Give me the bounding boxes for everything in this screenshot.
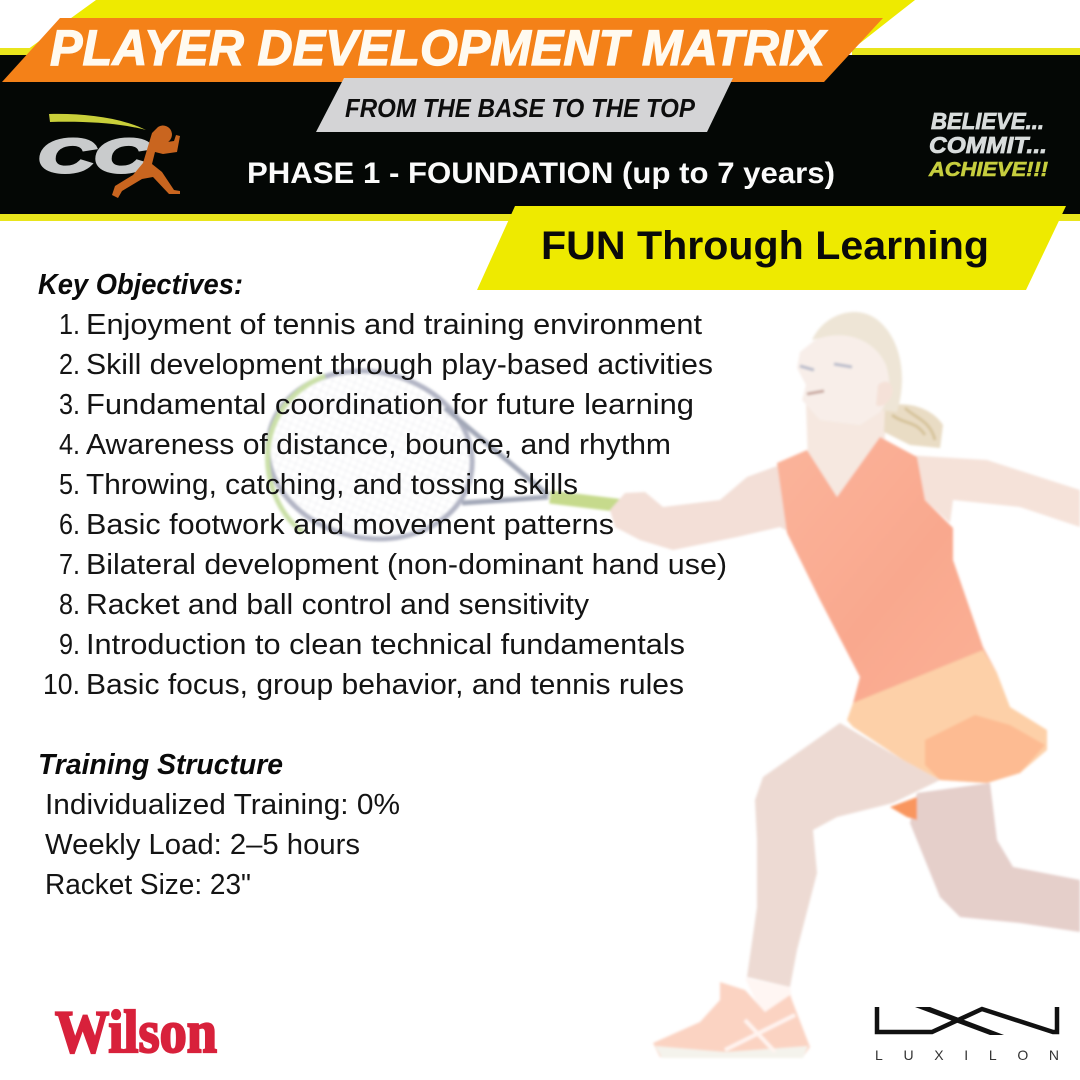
header banner [0, 0, 1080, 221]
L and N strokes [877, 1007, 1057, 1032]
throat [445, 408, 548, 503]
grip [550, 497, 632, 507]
sock [745, 978, 795, 1015]
objective 2: Skill development through play-based activities [86, 349, 713, 381]
dress top [777, 437, 997, 703]
frame [252, 352, 488, 558]
LXN mark [877, 1007, 1057, 1035]
weekly load: Weekly Load: 2–5 hours [45, 829, 360, 861]
subtitle: FROM THE BASE TO THE TOP [345, 93, 696, 123]
phase heading: PHASE 1 - FOUNDATION (up to 7 years) [247, 157, 835, 190]
objective 7: 7. [59, 549, 80, 581]
achieve: ACHIEVE!!! [928, 159, 1048, 181]
training structure heading: Training Structure [38, 749, 283, 781]
objective 2: 2. [59, 349, 80, 381]
neck and chest [806, 395, 885, 498]
yellow lower strip [0, 214, 1080, 221]
objective 9: Introduction to clean technical fundamentals [86, 629, 685, 661]
head [797, 312, 902, 425]
bun curls [892, 408, 935, 440]
objective 4: 4. [59, 429, 80, 461]
shoe [653, 982, 810, 1057]
tagline ribbon [477, 206, 1066, 290]
X diagonal [915, 1007, 1004, 1035]
green frame accent [268, 376, 325, 532]
mouth [807, 391, 824, 394]
back arm [905, 455, 1080, 527]
objective 8: Racket and ball control and sensitivity [86, 589, 590, 621]
tagline: FUN Through Learning [541, 224, 989, 268]
yellow ribbon [477, 206, 1066, 290]
logo letters: CC [38, 129, 152, 182]
shoe sole [655, 1046, 808, 1058]
face [797, 335, 889, 425]
shorts [890, 797, 917, 820]
objective 1: 1. [59, 309, 80, 341]
slogan [928, 108, 1048, 181]
objective 5: Throwing, catching, and tossing skills [86, 469, 578, 501]
logo: CCI [38, 114, 180, 198]
yellow top banner [20, 0, 915, 55]
bun mass [884, 404, 943, 448]
objective 6: 6. [59, 509, 80, 541]
objective 9: 9. [59, 629, 80, 661]
skirt shadow [925, 715, 1045, 783]
eyes [800, 364, 852, 370]
skirt [847, 650, 1047, 783]
front arm and hand [610, 463, 795, 550]
wordmark: LUXILON [875, 1047, 1059, 1063]
shoe stripes [725, 1015, 795, 1052]
bun [884, 404, 943, 448]
logo: Wilson: Wilson [55, 999, 217, 1065]
strings [256, 356, 484, 554]
objective 1: Enjoyment of tennis and training environment [86, 309, 702, 341]
swoosh [49, 114, 146, 130]
training structure [38, 749, 400, 901]
key objectives heading: Key Objectives: [38, 269, 243, 301]
objective 10: Basic focus, group behavior, and tennis rules [86, 669, 684, 701]
front leg [747, 723, 940, 987]
objective 4: Awareness of distance, bounce, and rhythm [86, 429, 671, 461]
hair [812, 312, 902, 412]
back leg [910, 783, 1080, 932]
objective 10: 10. [43, 669, 80, 701]
logo: Luxilon [875, 1007, 1059, 1063]
believe: BELIEVE... [931, 108, 1044, 134]
objective 3: 3. [59, 389, 80, 421]
objective 7: Bilateral development (non-dominant hand use) [86, 549, 727, 581]
key objectives [38, 269, 727, 701]
orange title ribbon [2, 18, 883, 82]
grey subtitle ribbon [316, 78, 733, 132]
title: PLAYER DEVELOPMENT MATRIX [50, 20, 828, 76]
black band [0, 55, 1080, 214]
yellow top strips [0, 48, 1080, 56]
individualized training: Individualized Training: 0% [45, 789, 400, 821]
ear [876, 382, 893, 406]
commit: COMMIT... [929, 132, 1047, 158]
objective 8: 8. [59, 589, 80, 621]
racket [252, 352, 632, 558]
player figure [112, 126, 180, 198]
racket size: Racket Size: 23" [45, 869, 251, 901]
objective 6: Basic footwork and movement patterns [86, 509, 614, 541]
objective 3: Fundamental coordination for future learning [86, 389, 694, 421]
player photo [252, 312, 1080, 1058]
objective 5: 5. [59, 469, 80, 501]
